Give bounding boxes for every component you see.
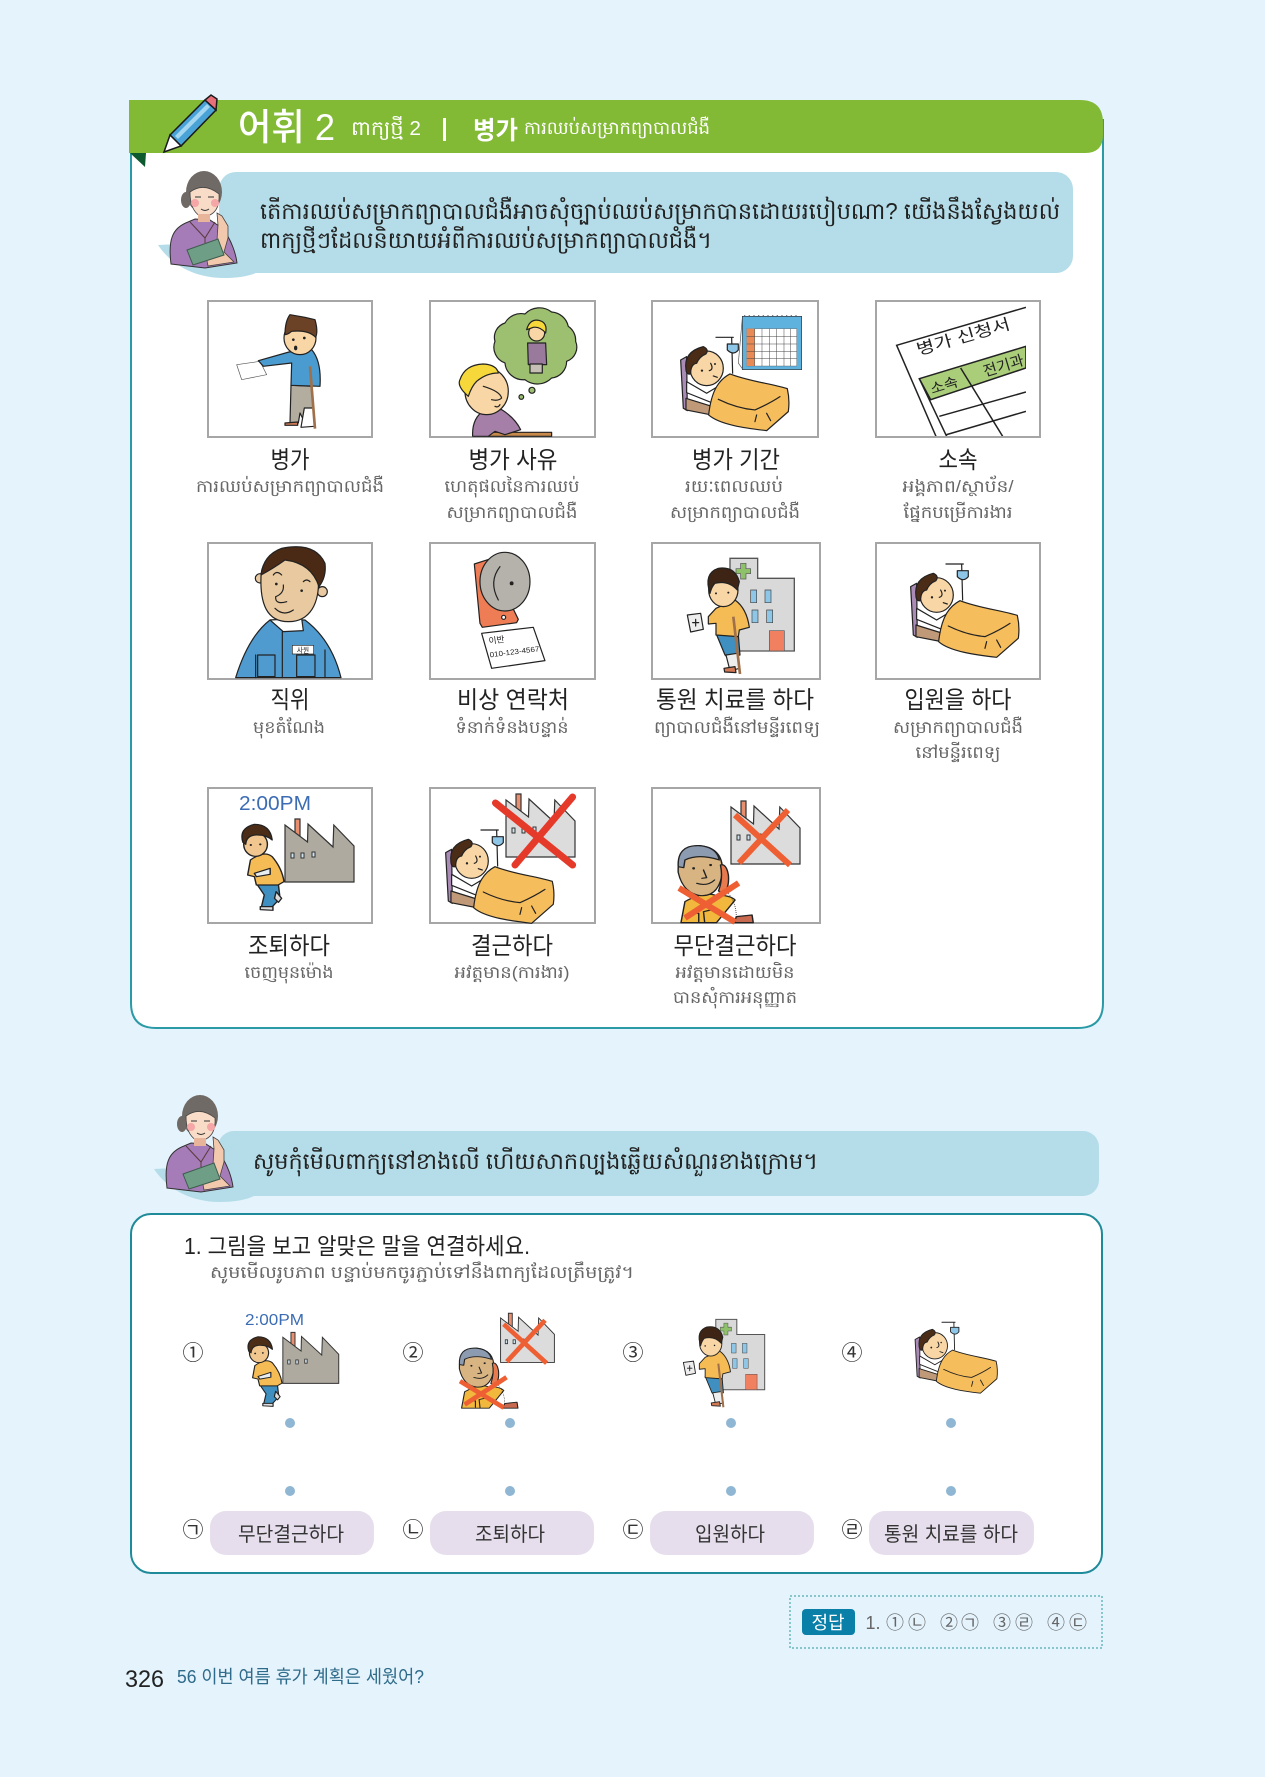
label: 무단결근하다 (674, 933, 796, 960)
label: 직위 (270, 687, 310, 714)
label: 소속 (938, 447, 978, 474)
chapter title: 56 이번 여름 휴가 계획은 세웠어? (177, 1667, 424, 1687)
icon: teacher (154, 1095, 254, 1202)
exercise picture 1: 2:00PM (245, 1312, 304, 1329)
panel: exercise (131, 1214, 1102, 1573)
exercise picture 3: ③ (622, 1342, 644, 1365)
label: 결근하다 (471, 933, 553, 960)
vocab card: 무단결근하다: អវត្តមានដោយមិន (676, 961, 794, 983)
answer choice ㉠ (182, 1511, 374, 1555)
exercise picture 2: ② (402, 1342, 424, 1365)
vocab card: 결근하다 (430, 788, 595, 983)
label: 조퇴하다 (248, 933, 330, 960)
speech bubble: intro: ពាក្យថ្មីៗដែលនិយាយអំពីការឈប់សម្រាកព្យាបាលជំងឺ។ (260, 225, 712, 254)
answer choice ㉡: 조퇴하다 (475, 1523, 545, 1546)
heading bar: 병가 (473, 117, 518, 145)
answer box: ④ (1047, 1613, 1065, 1633)
vocab card: 비상 연락처: ទំនាក់ទំនងបន្ទាន់ (456, 716, 568, 738)
answer choice ㉢ (622, 1511, 814, 1555)
answer box: 1. (865, 1613, 881, 1633)
answer box: ③ (993, 1613, 1011, 1633)
vocab card: 비상 연락처: 이반 (488, 634, 505, 646)
exercise picture 4: ④ (842, 1342, 862, 1365)
speech bubble: instruction (154, 1095, 1099, 1202)
vocab card: 병가 기간: សម្រាកព្យាបាលជំងឺ (670, 501, 800, 523)
heading bar: ការឈប់សម្រាកព្យាបាលជំងឺ (524, 116, 710, 139)
answer choice ㉡ (402, 1511, 594, 1555)
answer box: ㉠ (961, 1613, 979, 1633)
label: 병가 사유 (468, 447, 558, 474)
vocab card: 조퇴하다: ចេញមុនម៉ោង (244, 962, 334, 984)
answer choice ㉣: 통원 치료를 하다 (884, 1523, 1018, 1546)
vocab card: 병가 기간 (652, 301, 818, 523)
answer choice ㉢: ㉢ (622, 1519, 644, 1542)
speech bubble: intro (158, 171, 1073, 278)
heading bar: ពាក្យថ្មី 2 (351, 115, 421, 140)
vocab card: 직위 (208, 543, 372, 739)
answer box: 정답 (811, 1613, 845, 1633)
vocab card: 무단결근하다 (652, 788, 820, 1009)
answer choice ㉣ (842, 1511, 1034, 1555)
exercise picture 1: ① (182, 1342, 204, 1365)
panel: vocabulary (129, 95, 1103, 1028)
vocab card: 무단결근하다: បានសុំការអនុញ្ញាត (673, 986, 797, 1009)
answer box (790, 1596, 1102, 1648)
vocab card: 조퇴하다 (208, 788, 372, 984)
label: 병가 기간 (692, 447, 780, 474)
vocab card: 병가 사유: សម្រាកព្យាបាលជំងឺ (446, 501, 578, 523)
page number: 326 (125, 1666, 164, 1693)
exercise title: 1. 그림을 보고 알맞은 말을 연결하세요. (184, 1233, 530, 1259)
vocab card: 통원 치료를 하다 (652, 543, 820, 738)
exercise picture 4 (842, 1322, 997, 1393)
icon: teacher (158, 171, 258, 278)
answer choice ㉢: 입원하다 (695, 1523, 765, 1546)
answer choice ㉡: ㉡ (402, 1519, 424, 1542)
answer box: ㉡ (908, 1613, 926, 1633)
vocab card: 입원을 하다 (876, 543, 1040, 763)
vocab card: 입원을 하다: នៅមន្ទីរពេទ្យ (916, 741, 1000, 763)
label: 통원 치료를 하다 (656, 687, 814, 714)
vocab card: 비상 연락처: 010-123-4567 (489, 644, 540, 659)
answer box: ㉢ (1069, 1613, 1087, 1633)
vocab card: 소속: 병가 신청서 (914, 315, 1012, 359)
answer box: ② (940, 1613, 958, 1633)
answer choice ㉣: ㉣ (842, 1519, 862, 1542)
vocab card: 소속: 소속 (928, 373, 960, 397)
exercise picture 2 (402, 1313, 554, 1408)
vocab card: 직위: 사원 (297, 645, 309, 654)
icon: pencil (164, 95, 217, 152)
answer choice ㉠: 무단결근하다 (238, 1523, 344, 1546)
vocab card: 직위: មុខតំណែង (253, 716, 325, 739)
speech bubble: intro: តើការឈប់សម្រាកព្យាបាលជំងឺអាចសុំច្បាប់ឈប់សម្រាកបានដោយរបៀបណា? យើងនឹងស្វែងយល់ (260, 196, 1060, 227)
answer box: ㉣ (1015, 1613, 1033, 1633)
answer box: ① (886, 1613, 904, 1633)
answer choice ㉠: ㉠ (182, 1519, 204, 1542)
vocab card: 소속: ផ្នែកបម្រើការងារ (904, 501, 1012, 523)
vocab card: 조퇴하다: 2:00PM (239, 793, 311, 815)
vocab card: 병가: ការឈប់សម្រាកព្យាបាលជំងឺ (196, 475, 384, 497)
label: 입원을 하다 (904, 687, 1012, 714)
vocab card: 통원 치료를 하다: ព្យាបាលជំងឺនៅមន្ទីរពេទ្យ (654, 716, 820, 738)
vocab card: 결근하다: អវត្តមាន(ការងារ) (454, 963, 570, 983)
matching dots (285, 1418, 956, 1496)
exercise picture 3 (622, 1319, 765, 1407)
vocab card: 병가 (196, 301, 384, 497)
exercise picture 1 (182, 1312, 339, 1406)
heading bar (129, 95, 1103, 167)
vocab card: 소속 (876, 301, 1040, 523)
vocab card: 병가 사유: ហេតុផលនៃការឈប់ (444, 475, 580, 498)
vocab card: 비상 연락처 (430, 543, 595, 738)
exercise instruction: សូមមើលរូបភាព បន្ទាប់មកចូរភ្ជាប់ទៅនឹងពាក្យដែលត្រឹមត្រូវ។ (210, 1261, 634, 1284)
vocab card: 입원을 하다: សម្រាកព្យាបាលជំងឺ (893, 716, 1023, 738)
label: 병가 (270, 447, 310, 474)
vocab card: 병가 기간: រយៈពេលឈប់ (685, 475, 783, 496)
title text: 어휘 2 (238, 107, 335, 148)
vocab card: 소속: អង្គភាព/ស្ថាប័ន/ (902, 475, 1014, 497)
label: 비상 연락처 (457, 687, 569, 714)
speech bubble: instruction: សូមកុំមើលពាក្យនៅខាងលើ ហើយសាកល្បងឆ្លើយសំណួរខាងក្រោម។ (253, 1147, 818, 1177)
vocab card: 소속: 전기과 (981, 352, 1026, 380)
vocab card: 병가 사유 (430, 301, 595, 523)
